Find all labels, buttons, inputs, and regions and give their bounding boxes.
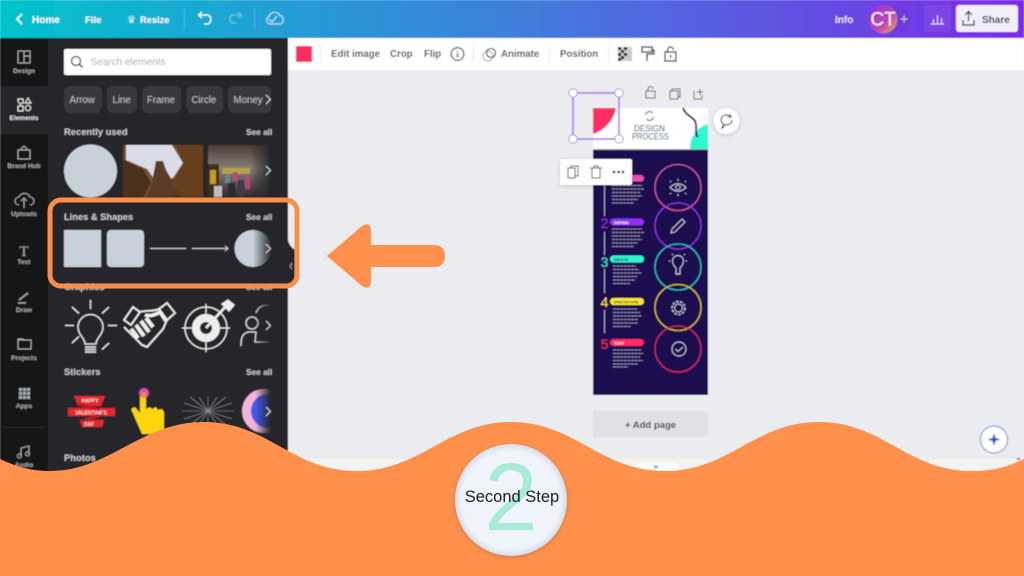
icon: transparency: [618, 47, 632, 61]
scrollbar arrows: [1016, 458, 1021, 477]
photos heading: Photos: [64, 452, 96, 463]
sticker: valentine's banner: HAPPY: [82, 398, 99, 404]
recent: tower photo: [123, 145, 203, 197]
square shape: [64, 230, 101, 267]
step badge: [455, 444, 567, 556]
sticker: valentine's banner: [68, 396, 115, 428]
share button: Share: [982, 15, 1010, 26]
title: DESIGN: [634, 124, 665, 134]
top navigation bar: Home: [32, 15, 60, 26]
line shape: [150, 248, 186, 250]
elements panel: See all: [246, 127, 272, 137]
keyword chips: [64, 86, 271, 113]
left icon rail: Apps: [16, 403, 33, 410]
step icons: [669, 179, 687, 356]
arrow shape: [192, 246, 228, 251]
contextual toolbar: Flip: [424, 49, 441, 60]
icon: elements: [18, 98, 31, 111]
info label: Info: [835, 15, 853, 26]
icon: redo: [230, 12, 242, 23]
step timeline numbers and pills: 3: [601, 254, 609, 270]
left icon rail: Design: [13, 68, 35, 75]
top navigation bar: File: [85, 15, 101, 26]
floating element toolbar: [560, 159, 632, 185]
circle shape: [234, 230, 272, 267]
elements panel: See all: [246, 212, 272, 222]
page scroll pill: [635, 463, 679, 477]
sticker: valentine's banner: VALENTINE'S: [75, 410, 108, 416]
teal corner: [690, 124, 708, 149]
left icon rail: Draw: [16, 307, 33, 314]
left icon rail: Projects: [11, 355, 37, 362]
icon: undo: [198, 12, 211, 24]
canvas background: [288, 70, 1024, 470]
left icon rail: Text: [18, 259, 31, 266]
top navigation bar: [0, 0, 1024, 38]
stickers heading: Stickers: [64, 366, 100, 377]
avatar: CT: [870, 10, 896, 30]
icon: paint roller: [642, 47, 654, 61]
step circles: [655, 164, 701, 372]
lines and shapes heading: Lines & Shapes: [64, 212, 133, 222]
page action icons: [646, 87, 703, 99]
elements panel: [48, 38, 295, 478]
rounded square shape: [107, 230, 144, 267]
icon: cloud saved: [267, 12, 283, 24]
big step number: 2: [484, 444, 538, 551]
keyword chips: Money: [234, 95, 263, 106]
icon: lock: [665, 47, 676, 61]
icon: info: [451, 48, 464, 60]
keyword chips: Arrow: [70, 95, 96, 106]
step label: Second Step: [465, 488, 559, 506]
step timeline numbers and pills: PROTOTYPE: [614, 300, 639, 304]
left icon rail: T: [19, 244, 29, 260]
orange wave footer: [0, 422, 1024, 576]
recent: street photo: [208, 145, 271, 197]
keyword chips: Frame: [147, 95, 175, 106]
graphic: target: [182, 300, 234, 352]
navy squiggle: [683, 108, 698, 137]
contextual toolbar: [288, 38, 1024, 70]
contextual toolbar: Position: [560, 49, 598, 60]
arrow pointing to Lines & Shapes: [327, 224, 445, 288]
recent: circle: [64, 144, 117, 198]
pink quarter shape: [593, 108, 616, 134]
comment button: [714, 108, 740, 134]
insights button: [924, 5, 951, 32]
title: PROCESS: [632, 132, 669, 142]
sticker: blue badge: [241, 388, 272, 434]
search box: [64, 49, 271, 75]
contextual toolbar: Edit image: [331, 49, 381, 60]
step timeline numbers and pills: [601, 175, 644, 352]
graphic: handshake: [124, 303, 175, 347]
recently used heading: Recently used: [64, 126, 128, 137]
left icon rail: [0, 38, 48, 478]
icon: animate: [483, 48, 496, 61]
callout frame: Lines & Shapes: [50, 200, 297, 286]
selection frame: [569, 89, 623, 143]
left icon rail: Brand Hub: [7, 163, 41, 170]
bottom status strip: [288, 459, 1024, 474]
step timeline numbers and pills: 4: [601, 294, 609, 310]
top navigation bar: +: [900, 10, 908, 26]
step timeline numbers and pills: 5: [601, 336, 609, 352]
contextual toolbar: Crop: [390, 49, 413, 60]
elements panel: See all: [246, 367, 272, 377]
step timeline numbers and pills: TEST: [614, 340, 625, 346]
sticker: pointing hand: [131, 388, 164, 434]
sticker: starburst: [182, 397, 234, 425]
design page: [593, 108, 708, 395]
search box: Search elements: [90, 57, 166, 68]
left icon rail: Elements: [10, 115, 39, 122]
top navigation bar: Resize: [140, 15, 169, 25]
keyword chips: Line: [112, 95, 131, 106]
graphic: light bulb: [65, 300, 117, 352]
add page button: [593, 411, 708, 437]
elements panel: See all: [246, 282, 272, 292]
sticker: valentine's banner: DAY: [84, 422, 95, 428]
contextual toolbar: Animate: [501, 49, 540, 60]
title: [632, 124, 669, 142]
step timeline numbers and pills: DEFINE: [614, 220, 629, 225]
keyword chips: Circle: [192, 95, 216, 106]
rotate handle: [642, 108, 658, 124]
add page button: + Add page: [625, 420, 676, 431]
graphics heading: Graphics: [64, 281, 105, 292]
step timeline numbers and pills: IDEATE: [614, 257, 629, 262]
step timeline numbers and pills: 2: [601, 215, 609, 231]
icon: design: [18, 51, 30, 63]
avatar: [868, 4, 898, 34]
graphic: people: [241, 300, 271, 356]
panel collapse tab: [288, 240, 295, 284]
left icon rail: Uploads: [11, 211, 37, 218]
magic assistant button: [980, 426, 1008, 453]
left icon rail: Audio: [15, 462, 33, 469]
top navigation bar: ♛: [127, 15, 136, 26]
step body text lines: [612, 186, 644, 367]
share button: [956, 5, 1018, 32]
